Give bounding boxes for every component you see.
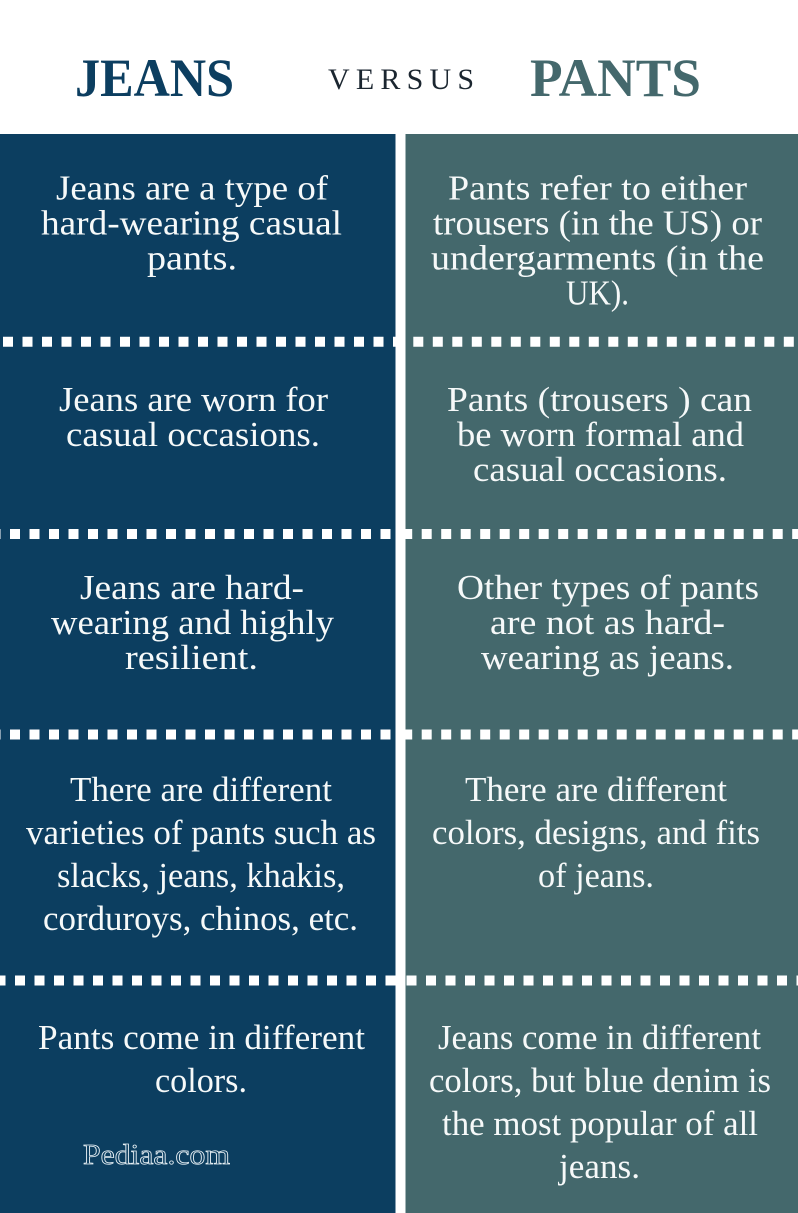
- text: jeans row 4: varieties of pants such as: [26, 813, 376, 852]
- text: jeans row 5: colors.: [155, 1061, 247, 1100]
- logo: Pediaa.com: Pediaa.com: [83, 1140, 230, 1171]
- text: pants row 2: [447, 380, 752, 489]
- text: pants row 1: undergarments (in the: [431, 238, 764, 278]
- heading: JEANS: JEANS: [75, 48, 234, 108]
- text: jeans row 2: Jeans are worn for: [59, 380, 328, 419]
- text: pants row 5: jeans.: [557, 1147, 640, 1186]
- text: pants row 4: [432, 770, 760, 895]
- text: jeans row 1: Jeans are a type of: [56, 168, 328, 208]
- heading: VERSUS: VERSUS: [328, 63, 474, 96]
- text: jeans row 5: [38, 1018, 365, 1100]
- text: pants row 2: Pants (trousers ) can: [447, 380, 752, 419]
- text: pants row 3: Other types of pants: [457, 568, 759, 607]
- panel: jeans column: [0, 134, 396, 1213]
- text: pants row 5: colors, but blue denim is: [429, 1061, 771, 1100]
- text: pants row 2: casual occasions.: [473, 450, 727, 489]
- text: pants row 4: colors, designs, and fits: [432, 813, 760, 852]
- text: jeans row 1: hard-wearing casual: [41, 204, 342, 242]
- text: pants row 1: trousers (in the US) or: [433, 204, 762, 242]
- text: pants row 1: [431, 168, 764, 312]
- text: pants row 1: UK).: [566, 274, 629, 312]
- text: pants row 5: [429, 1018, 771, 1186]
- text: jeans row 3: resilient.: [125, 638, 258, 677]
- text: pants row 5: the most popular of all: [442, 1104, 758, 1143]
- text: jeans row 4: slacks, jeans, khakis,: [57, 856, 345, 895]
- text: jeans row 4: There are different: [70, 770, 332, 809]
- text: jeans row 3: Jeans are hard-: [80, 568, 304, 607]
- text: pants row 5: Jeans come in different: [438, 1018, 761, 1057]
- text: jeans row 2: [59, 380, 328, 454]
- text: jeans row 2: casual occasions.: [66, 415, 320, 454]
- text: jeans row 3: [51, 568, 335, 677]
- text: pants row 4: There are different: [465, 770, 727, 809]
- text: pants row 3: wearing as jeans.: [481, 638, 734, 677]
- text: pants row 1: Pants refer to either: [448, 168, 747, 208]
- text: jeans row 1: [41, 168, 342, 278]
- text: jeans row 1: pants.: [147, 238, 237, 278]
- text: pants row 2: be worn formal and: [457, 415, 745, 454]
- text: pants row 3: are not as hard-: [490, 603, 725, 642]
- text: pants row 3: [457, 568, 759, 677]
- panel: pants column: [406, 134, 798, 1213]
- text: jeans row 4: [26, 770, 376, 938]
- text: jeans row 5: Pants come in different: [38, 1018, 365, 1057]
- text: pants row 4: of jeans.: [538, 856, 654, 895]
- heading: PANTS: PANTS: [530, 48, 701, 108]
- text: jeans row 4: corduroys, chinos, etc.: [43, 899, 358, 938]
- text: jeans row 3: wearing and highly: [51, 603, 335, 642]
- dotted row dividers: [0, 342, 798, 980]
